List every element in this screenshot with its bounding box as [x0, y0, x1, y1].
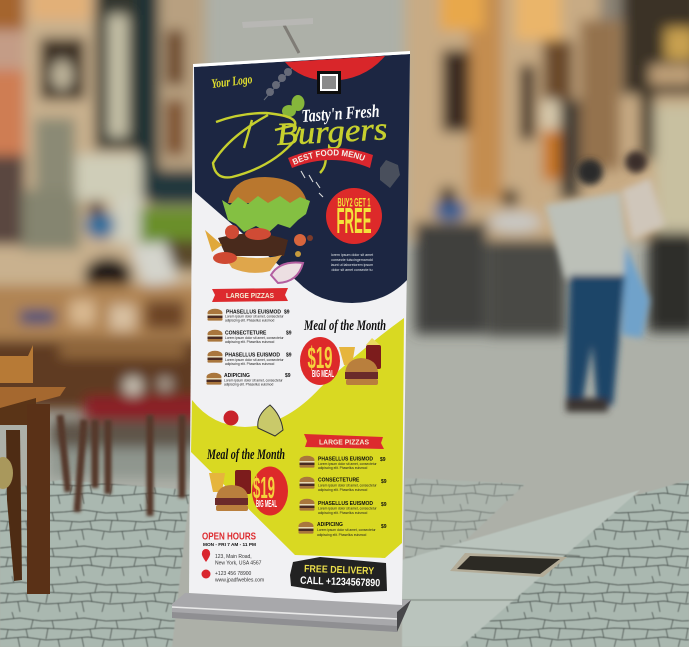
chair legs: [60, 415, 182, 516]
ribbon: large pizzas left: LARGE PIZZAS: [226, 293, 274, 300]
sunburst ticks: [301, 171, 323, 197]
menu item 4: adipiscing elit. Phasellus euismod: [317, 533, 366, 537]
heading: meal of the month left: Meal of the Month: [206, 447, 285, 463]
menu item 1: [208, 309, 290, 322]
menu item 4: Lorem ipsum dolor sit amet, consectetur: [224, 378, 284, 382]
delivery box: [290, 557, 387, 593]
contact: www.jpadfwebles.com: [215, 578, 264, 584]
menu item 1: Lorem ipsum dolor sit amet, consectetur: [318, 462, 378, 466]
ribbon: large pizzas left: [212, 288, 288, 302]
menu item 3: PHASELLUS EUISMOD: [225, 352, 280, 358]
menu item 3: Lorem ipsum dolor sit amet, consectetur: [318, 506, 378, 510]
tagline: Tasty'n Fresh: [301, 101, 380, 126]
menu item 2: [300, 477, 387, 492]
offer badge: buy 2 get 1 free: BUY2 GET 1: [338, 196, 371, 210]
header body text: [331, 253, 373, 272]
menu item 4: $9: [381, 524, 387, 530]
logo: Your Logo: [211, 71, 253, 91]
menu item 1: adipiscing elit. Phasellus euismod: [318, 466, 367, 470]
burger illustration: [205, 177, 313, 283]
menu item 1: PHASELLUS EUISMOD: [318, 456, 373, 462]
meal photo right: [339, 338, 381, 385]
menu list right: [298, 456, 387, 537]
icon: location pin: [202, 549, 210, 562]
ribbon: best food menu: BEST FOOD MENU: [292, 150, 366, 165]
price badge right: $19: [308, 340, 332, 375]
price badge right: BIG MEAL: [312, 369, 334, 380]
menu item 2: Lorem ipsum dolor sit amet, consectetur: [318, 484, 378, 488]
menu item 2: adipiscing elit. Phasellus euismod: [318, 488, 367, 492]
price badge left: $19: [253, 470, 275, 505]
menu item 4: ADIPICING: [317, 522, 343, 528]
navy header section: [194, 54, 410, 303]
icon: taco sketch: [258, 405, 283, 436]
QR code: [317, 71, 341, 94]
meal photo left: [209, 470, 251, 511]
menu item 2: Lorem ipsum dolor sit amet, consectetur: [225, 336, 285, 340]
menu item 3: $9: [286, 352, 292, 358]
roll-up base: [172, 593, 411, 632]
banner panel: [189, 51, 410, 605]
ribbon: large pizzas right: LARGE PIZZAS: [319, 440, 369, 446]
right buildings: [405, 0, 689, 240]
red top arc: [285, 56, 385, 81]
menu item 4: [298, 522, 387, 537]
menu item 2: [208, 330, 292, 344]
menu item 1: PHASELLUS EUISMOD: [226, 310, 281, 316]
drain grate: [450, 553, 567, 577]
menu item 2: CONSECTETURE: [318, 478, 360, 484]
menu item 4: Lorem ipsum dolor sit amet, consectetur: [317, 528, 377, 532]
delivery box: CALL +1234567890: [300, 575, 380, 589]
open hours: MON - FRI 7 AM - 11 PM: [203, 542, 256, 548]
menu item 4: ADIPICING: [224, 373, 250, 379]
menu item 3: $9: [381, 502, 387, 508]
delivery box: FREE DELIVERY: [304, 564, 375, 577]
wooden table: [0, 345, 66, 594]
menu item 3: adipiscing elit. Phasellus euismod: [318, 511, 367, 515]
header body text: dolor sit amet consecte tu: [332, 268, 372, 272]
header body text: iaunt ut laboreiorem ipsum: [331, 263, 373, 267]
address: New York, USA 4567: [215, 560, 262, 566]
price badge left: [252, 466, 288, 516]
open hours: [202, 532, 256, 548]
menu item 2: adipiscing elit. Phasellus euismod: [225, 340, 274, 344]
menu item 4: $9: [285, 373, 291, 379]
header body text: consecte tuiscingemamdd: [331, 258, 373, 262]
menu item 1: $9: [284, 310, 290, 316]
yellow wave section: [191, 318, 404, 558]
price badge left: BIG MEAL: [256, 499, 277, 510]
icon: globe: [202, 570, 210, 578]
menu item 1: adipiscing elit. Phasellus euismod: [225, 318, 274, 322]
address: [215, 554, 262, 566]
menu item 4: [206, 373, 291, 386]
dining area: [0, 340, 205, 410]
title: Burgers: Burgers: [275, 110, 388, 152]
menu item 2: $9: [381, 479, 387, 485]
top white bar: [193, 51, 410, 67]
stand pole and top clip: [242, 18, 313, 53]
menu list left: [206, 309, 292, 386]
address: 123, Main Road,: [215, 554, 252, 560]
menu item 3: PHASELLUS EUISMOD: [318, 501, 373, 507]
menu item 2: CONSECTETURE: [225, 330, 267, 336]
contact: [215, 571, 264, 584]
left buildings: [0, 0, 205, 300]
icon: pepper: [380, 160, 400, 188]
menu item 3: [300, 499, 387, 515]
menu item 1: Lorem ipsum dolor sit amet, consectetur: [225, 314, 285, 318]
title: Burgers: [213, 110, 388, 177]
open hours: OPEN HOURS: [202, 532, 256, 542]
menu item 1: [300, 456, 386, 470]
menu item 4: adipiscing elit. Phasellus euismod: [224, 382, 273, 386]
cafe seating: [415, 222, 487, 334]
contact: +123 456 78900: [215, 571, 252, 577]
menu item 3: [208, 351, 292, 366]
icon: tomato: [224, 410, 238, 426]
blurred pedestrian: [545, 151, 665, 412]
menu item 3: adipiscing elit. Phasellus euismod: [225, 362, 274, 366]
banner panel: FREE: [336, 200, 372, 241]
icon: skewer: [264, 68, 292, 100]
icon: leaves: [282, 95, 304, 117]
menu item 2: $9: [286, 330, 292, 336]
heading: meal of the month right: Meal of the Month: [303, 318, 386, 334]
menu item 3: Lorem ipsum dolor sit amet, consectetur: [225, 358, 285, 362]
offer badge: buy 2 get 1 free: [326, 188, 382, 244]
cobblestone ground: [0, 478, 689, 647]
menu item 1: $9: [380, 457, 386, 463]
ribbon: large pizzas right: [304, 434, 384, 449]
header body text: lorem ipsum dolor sit amet: [331, 253, 373, 257]
price badge right: [300, 337, 340, 385]
